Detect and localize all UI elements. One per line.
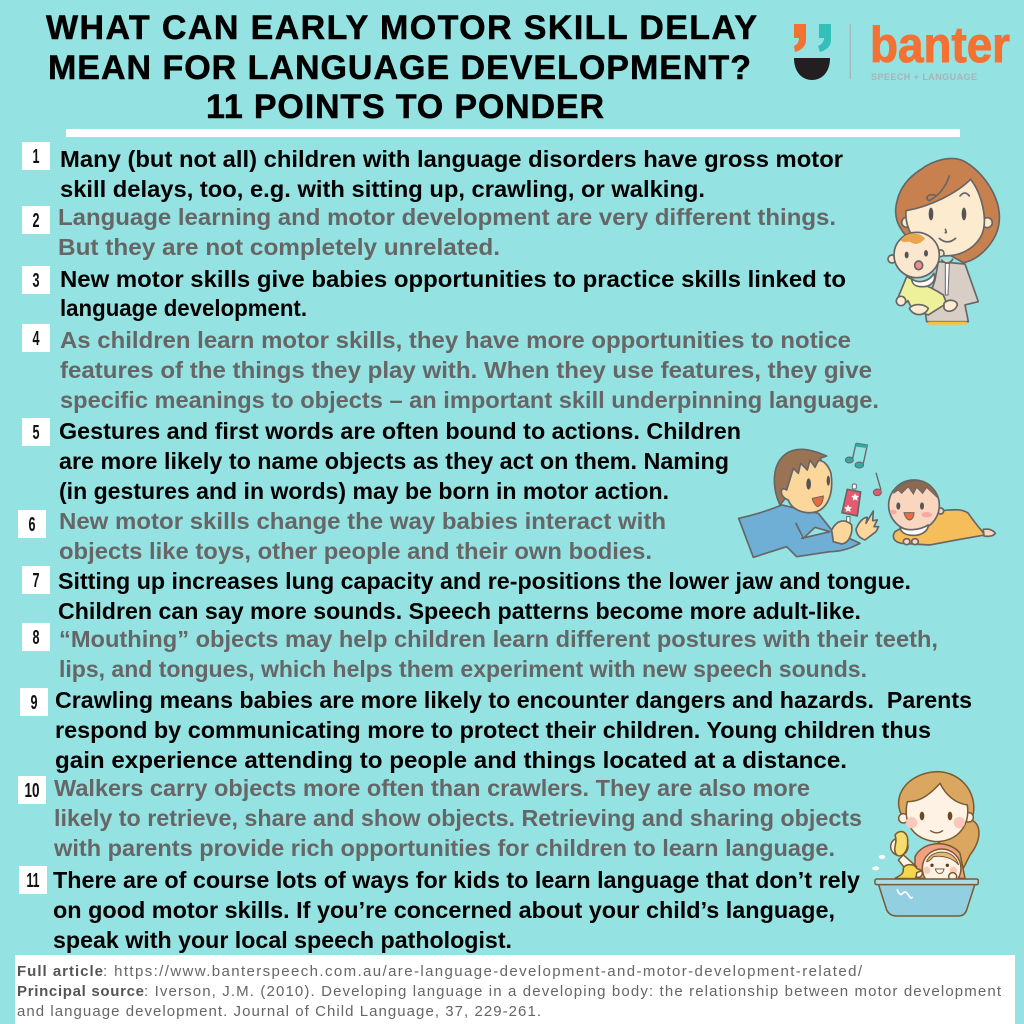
- point 10 text: [53, 775, 862, 861]
- logo divider: [850, 24, 851, 79]
- point 3: [22, 266, 846, 321]
- title rule: [66, 129, 960, 137]
- illustration: father and baby with toy: [739, 443, 995, 557]
- point 10 text: with parents provide rich opportunities for children to learn language.: [53, 835, 835, 861]
- point 1 text: skill delays, too, e.g. with sitting up, crawling, or walking.: [60, 176, 705, 202]
- bathtub: [875, 879, 978, 916]
- number badge 11: [19, 866, 47, 894]
- baby's head: [888, 232, 944, 287]
- mother's ears: [902, 217, 992, 228]
- point 3 text: New motor skills give babies opportunities to practice skills linked to: [60, 266, 846, 292]
- point 4 text: As children learn motor skills, they have more opportunities to notice: [60, 327, 851, 353]
- point 2 text: But they are not completely unrelated.: [58, 234, 500, 260]
- father's collar detail: [796, 523, 830, 538]
- number badge 8: [22, 623, 50, 651]
- number badge 6: 6: [28, 514, 36, 536]
- point 4: [22, 324, 879, 413]
- icon: orange quote mark: [794, 24, 806, 52]
- mother's features: [927, 176, 969, 242]
- mother's body: [915, 844, 965, 878]
- point 3 text: [60, 266, 846, 321]
- principal source citation: Principal source: [17, 983, 144, 1000]
- point 5 text: [59, 418, 741, 504]
- point 4 text: specific meanings to objects – an important skill underpinning language.: [60, 387, 879, 413]
- number badge 7: [22, 566, 50, 594]
- point 11: [19, 866, 860, 953]
- wordmark: banter: banter: [870, 17, 1010, 73]
- icon: teal quote mark: [818, 24, 831, 52]
- point 2 text: Language learning and motor development are very different things.: [58, 204, 836, 230]
- baby's hands: [896, 296, 957, 315]
- title: MEAN FOR LANGUAGE DEVELOPMENT?: [48, 49, 751, 87]
- point 3 text: language development.: [60, 295, 307, 321]
- number badge 10: [18, 776, 46, 804]
- mother's arm and sponge: [891, 832, 917, 877]
- father's body: [739, 505, 860, 557]
- mother's jacket: [925, 262, 978, 322]
- title: [46, 9, 757, 126]
- point 11 text: There are of course lots of ways for kids to learn language that don’t rely: [53, 867, 860, 893]
- point 9 text: respond by communicating more to protect their children. Young children thus: [55, 717, 931, 743]
- point 5 text: (in gestures and in words) may be born in motor action.: [59, 478, 669, 504]
- point 7: [22, 566, 911, 624]
- number badge 1: 1: [32, 146, 40, 168]
- point 1 text: [60, 146, 843, 202]
- point 2 text: [58, 204, 836, 260]
- baby's hands: [903, 539, 918, 545]
- music notes: [845, 443, 881, 496]
- baby's bib: [900, 525, 928, 535]
- point 6 text: New motor skills change the way babies interact with: [59, 508, 666, 534]
- point 10: [18, 775, 862, 861]
- point 7 text: Children can say more sounds. Speech patterns become more adult-like.: [58, 598, 861, 624]
- title: WHAT CAN EARLY MOTOR SKILL DELAY: [46, 9, 757, 47]
- mother's hair: [896, 158, 999, 263]
- number badge 7: 7: [32, 570, 40, 592]
- point 4 text: [60, 327, 879, 413]
- toy rattle: [842, 484, 861, 527]
- point 5: [22, 418, 741, 504]
- principal source citation: : Iverson, J.M. (2010). Developing language in a developing body: the relationship between motor development: [144, 983, 1002, 1000]
- number badge 11: 11: [26, 870, 40, 892]
- number badge 1: [22, 142, 50, 170]
- number badge 5: [22, 418, 50, 446]
- number badge 6: [18, 510, 46, 538]
- number badge 2: [22, 206, 50, 234]
- point 6 text: objects like toys, other people and their own bodies.: [59, 538, 652, 564]
- number badge 9: [20, 688, 48, 716]
- number badge 10: 10: [24, 780, 40, 802]
- point 10 text: likely to retrieve, share and show objects. Retrieving and sharing objects: [54, 805, 862, 831]
- mother's face: [899, 783, 973, 842]
- number badge 2: 2: [32, 210, 40, 232]
- baby's foot: [983, 529, 995, 536]
- point 8 text: [59, 626, 938, 682]
- baby's body: [893, 510, 985, 545]
- mother's hair: [899, 772, 979, 868]
- point 9 text: Crawling means babies are more likely to encounter dangers and hazards. Parents: [55, 687, 972, 713]
- point 7 text: Sitting up increases lung capacity and re-positions the lower jaw and tongue.: [58, 568, 911, 594]
- footer: sources panel: [15, 955, 1015, 1024]
- number badge 3: 3: [32, 270, 40, 292]
- point 8 text: “Mouthing” objects may help children learn different postures with their teeth,: [59, 626, 938, 652]
- illustration: mother holding baby: [888, 158, 999, 325]
- logo: banter speech + language: [794, 17, 1010, 82]
- illustration: mother bathing baby: [872, 772, 979, 916]
- point 4 text: features of the things they play with. When they use features, they give: [60, 357, 872, 383]
- baby's body: [897, 277, 947, 315]
- point 9 text: [55, 687, 972, 773]
- point 6 text: [59, 508, 666, 564]
- number badge 9: 9: [30, 692, 38, 714]
- baby: [914, 849, 961, 888]
- point 1 text: Many (but not all) children with language disorders have gross motor: [60, 146, 843, 172]
- number badge 3: [22, 266, 50, 294]
- point 8 text: lips, and tongues, which helps them experiment with new speech sounds.: [59, 656, 867, 682]
- point 11 text: [53, 867, 860, 953]
- point 5 text: Gestures and first words are often bound to actions. Children: [59, 418, 741, 444]
- point 2: [22, 204, 836, 260]
- icon: black smile: [794, 58, 830, 80]
- point 5 text: are more likely to name objects as they act on them. Naming: [59, 448, 729, 474]
- mother's shirt: [928, 259, 967, 325]
- principal source citation: and language development. Journal of Child Language, 37, 229-261.: [17, 1003, 541, 1020]
- full article link: : https://www.banterspeech.com.au/are-language-development-and-motor-development-related/: [103, 963, 863, 980]
- point 11 text: speak with your local speech pathologist.: [53, 927, 512, 953]
- father's hands: [832, 511, 879, 544]
- point 6: [18, 508, 666, 564]
- point 8: [22, 623, 938, 682]
- point 9 text: gain experience attending to people and things located at a distance.: [55, 747, 847, 773]
- point 10 text: Walkers carry objects more often than crawlers. They are also more: [54, 775, 810, 801]
- rubber duck: [895, 865, 922, 879]
- principal source citation: [17, 983, 1002, 1020]
- number badge 5: 5: [32, 422, 40, 444]
- title: 11 POINTS TO PONDER: [206, 88, 604, 126]
- mother's face: [906, 179, 984, 256]
- point 11 text: on good motor skills. If you’re concerned about your child’s language,: [53, 897, 835, 923]
- tagline: SPEECH + LANGUAGE: [871, 72, 977, 82]
- number badge 4: [22, 324, 50, 352]
- point 7 text: [58, 568, 911, 624]
- full article link: Full article: [17, 963, 103, 980]
- point 9: [20, 687, 972, 773]
- father's head: [774, 449, 832, 513]
- number badge 8: 8: [32, 627, 40, 649]
- baby's head: [889, 480, 944, 531]
- point 1: [22, 142, 843, 202]
- water droplets: [872, 855, 885, 870]
- number badge 4: 4: [32, 328, 40, 350]
